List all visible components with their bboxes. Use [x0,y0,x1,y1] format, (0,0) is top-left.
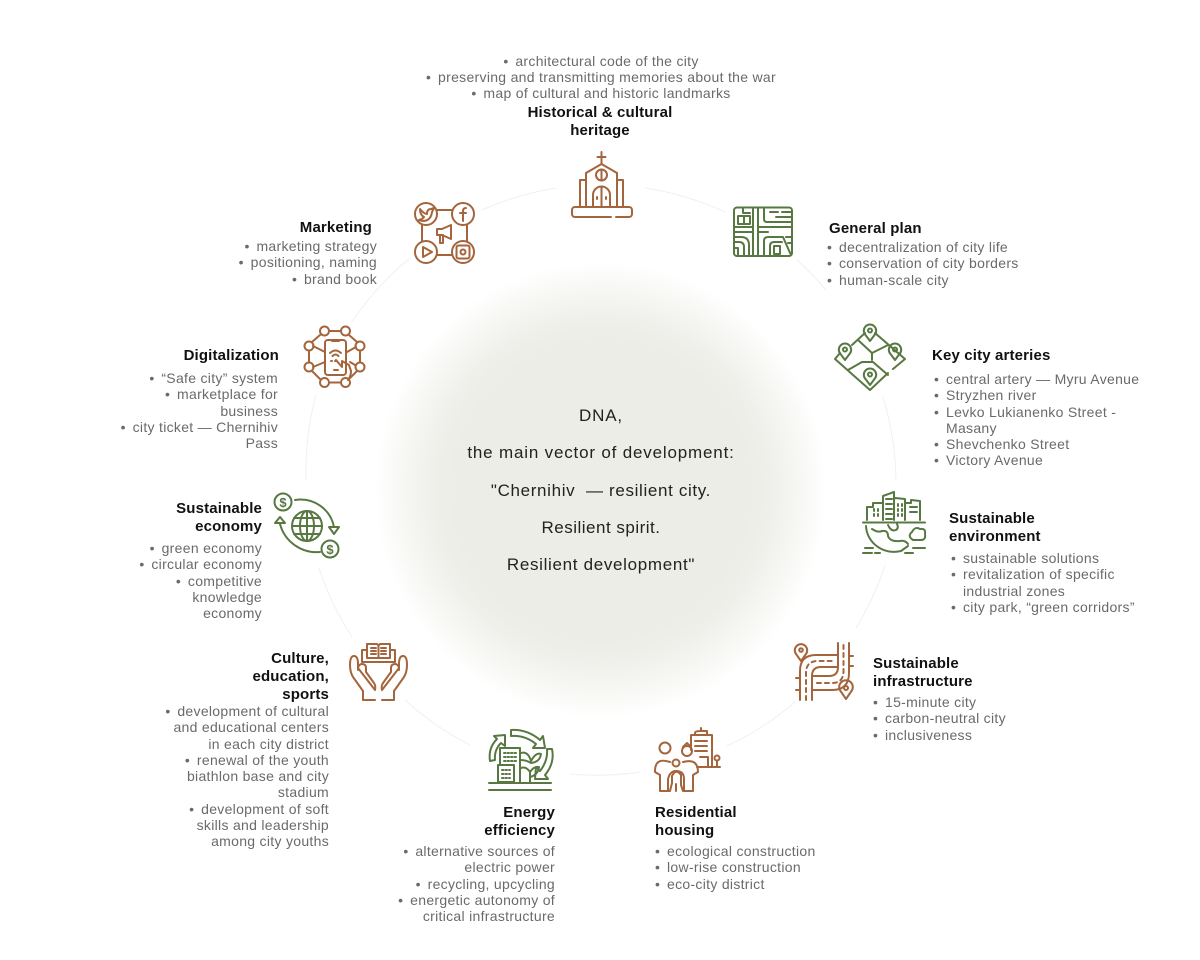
sustainable environment heading: Sustainable [949,510,1035,527]
digitalization list: business [220,402,278,418]
culture list: in each city district [208,736,329,752]
sustainable infrastructure list: inclusiveness [885,726,972,742]
sustainable infrastructure list: 15-minute city [885,694,976,710]
culture heading [252,650,329,703]
central statement: Resilient development" [507,555,695,574]
sustainable economy list: • green economy [150,540,262,556]
sustainable economy list: • circular economy [139,556,262,572]
general plan list: human-scale city [839,272,949,288]
sustainable environment heading: environment [949,528,1041,545]
digitalization list: • “Safe city” system [149,370,278,386]
heritage heading: heritage [570,122,630,139]
residential housing list: ecological construction [667,843,816,859]
icon: globe with money cycle: $ [326,542,334,557]
heritage text: • architectural code of the city [503,52,699,68]
culture list: stadium [278,784,329,800]
key city arteries list: Levko Lukianenko Street - [946,404,1116,420]
culture heading: education, [252,668,329,685]
culture list: • development of cultural [165,703,329,719]
digitalization list: • city ticket — Chernihiv [121,419,278,435]
marketing list: • positioning, naming [239,254,377,270]
central statement: "Chernihiv — resilient city. [491,481,711,500]
heritage text: • map of cultural and historic landmarks [471,85,731,101]
key city arteries list: Shevchenko Street [946,436,1069,452]
residential housing list: eco-city district [667,876,765,892]
culture list: biathlon base and city [187,768,329,784]
energy efficiency heading: efficiency [484,822,555,839]
energy efficiency list: • alternative sources of [403,843,555,859]
heritage heading: Historical & cultural [528,104,672,121]
key city arteries list: Masany [946,420,997,436]
central statement: Resilient spirit. [541,518,661,537]
digitalization list: Pass [246,435,278,451]
residential housing heading [655,804,737,839]
sustainable economy heading: Sustainable [176,500,262,517]
residential housing heading: Residential [655,804,737,821]
sustainable infrastructure list [874,694,1006,742]
sustainable environment list: industrial zones [963,582,1065,598]
key city arteries list [934,371,1139,468]
marketing list: • brand book [292,270,377,286]
culture list: • renewal of the youth [185,752,329,768]
energy efficiency list: • recycling, upcycling [416,876,555,892]
sustainable infrastructure list: carbon-neutral city [885,710,1006,726]
energy efficiency list [398,843,555,924]
sustainable infrastructure heading: infrastructure [873,673,973,690]
energy efficiency list: • energetic autonomy of [398,892,555,908]
sustainable economy list: • competitive [176,572,262,588]
culture heading: Culture, [271,650,329,667]
marketing heading: Marketing [300,219,372,236]
culture list: and educational centers [173,719,329,735]
sustainable environment list: city park, “green corridors” [963,599,1135,615]
sustainable infrastructure heading [873,655,973,690]
residential housing list [656,843,816,892]
culture list: • development of soft [189,800,329,816]
general plan list: conservation of city borders [839,255,1019,271]
digitalization heading: Digitalization [184,347,279,364]
marketing list [239,238,377,286]
energy efficiency heading: Energy [503,804,555,821]
energy efficiency heading [484,804,555,839]
culture heading: sports [282,686,329,703]
sustainable environment list [952,550,1135,615]
sustainable environment list: sustainable solutions [963,550,1099,566]
sustainable economy list: economy [203,605,262,621]
central statement [467,406,735,574]
key city arteries list: central artery — Myru Avenue [946,371,1139,387]
sustainable economy heading [176,500,262,535]
heritage text [426,52,776,101]
key city arteries heading: Key city arteries [932,347,1050,364]
digitalization list [121,370,278,451]
sustainable economy list: knowledge [192,589,262,605]
digitalization list: • marketplace for [165,386,278,402]
heritage heading [528,104,672,139]
residential housing list: low-rise construction [667,859,801,875]
sustainable environment list: revitalization of specific [963,566,1115,582]
sustainable economy heading: economy [195,518,262,535]
general plan heading: General plan [829,220,922,237]
icon: globe with money cycle: $ [279,495,287,510]
key city arteries list: Victory Avenue [946,452,1043,468]
sustainable environment heading [949,510,1041,545]
residential housing heading: housing [655,822,714,839]
sustainable infrastructure heading: Sustainable [873,655,959,672]
culture list [165,703,329,849]
central statement: DNA, [579,406,623,425]
energy efficiency list: critical infrastructure [423,908,555,924]
sustainable economy list [139,540,262,621]
key city arteries list: Stryzhen river [946,387,1037,403]
culture list: skills and leadership [197,817,329,833]
culture list: among city youths [211,833,329,849]
central glow [375,262,827,718]
energy efficiency list: electric power [464,859,555,875]
marketing list: • marketing strategy [244,238,377,254]
general plan list [828,239,1019,288]
general plan list: decentralization of city life [839,239,1008,255]
central statement: the main vector of development: [467,443,735,462]
heritage text: • preserving and transmitting memories about the war [426,69,776,85]
